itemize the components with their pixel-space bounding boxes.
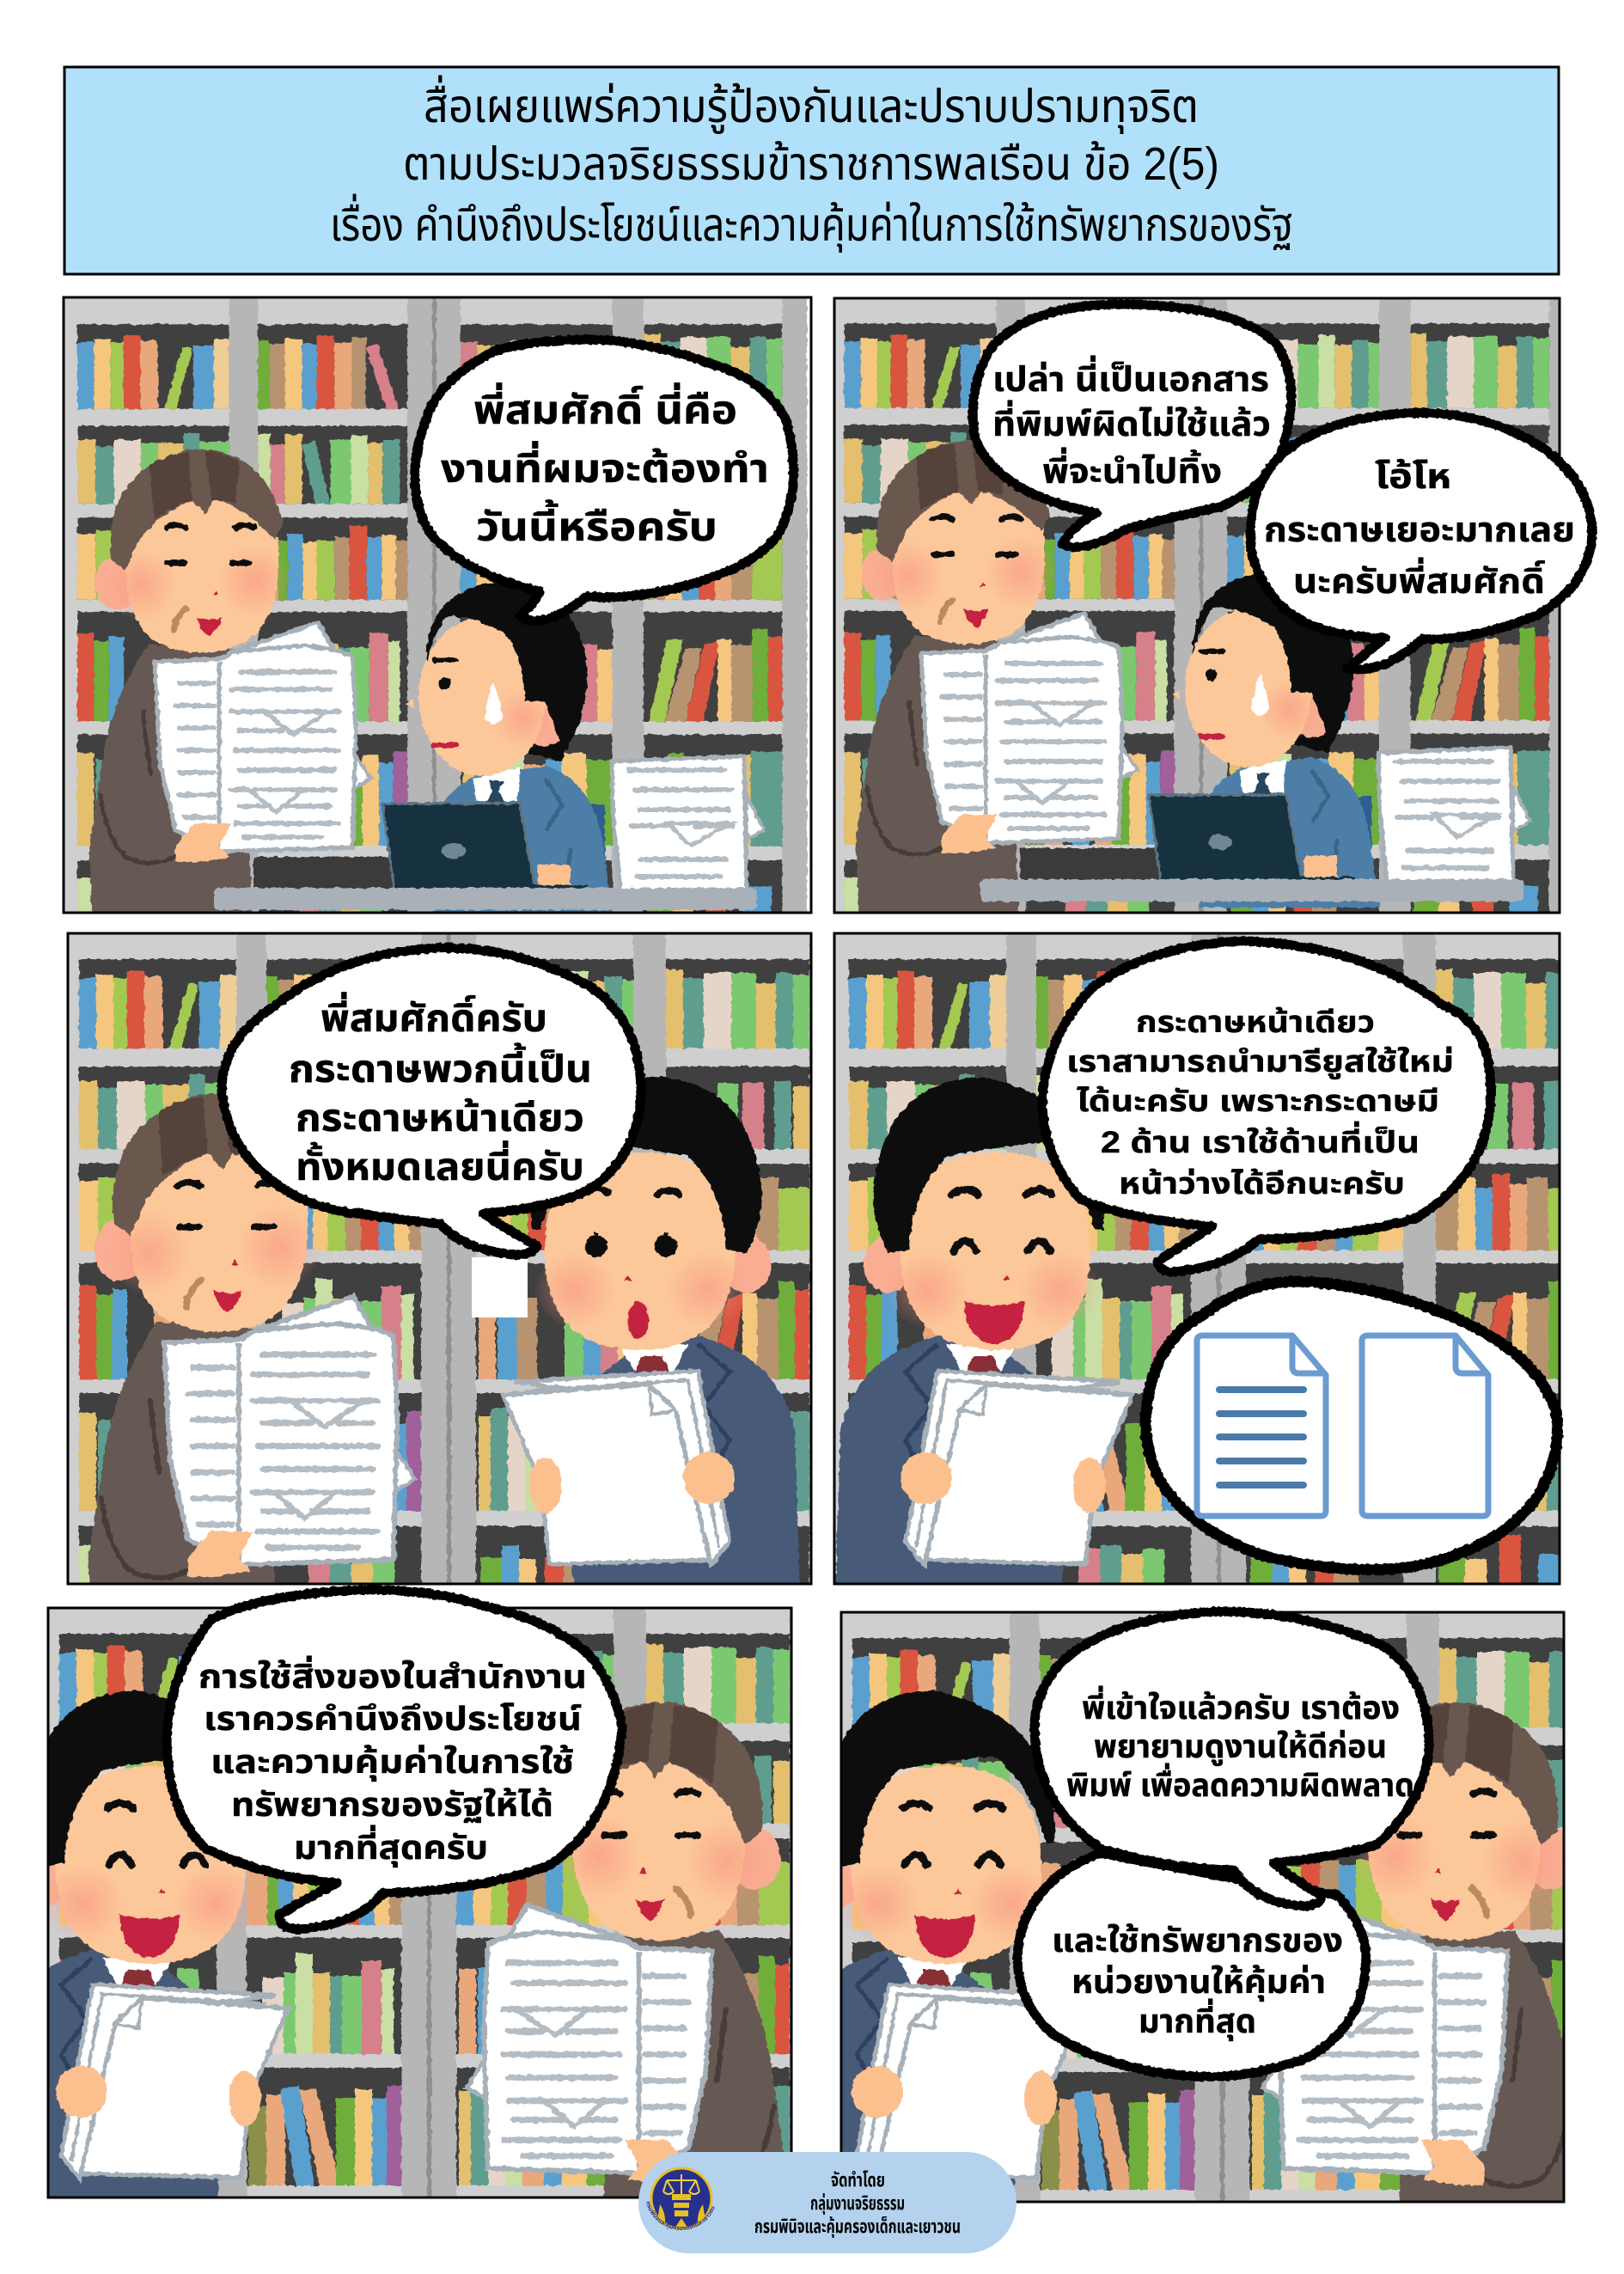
speech bubble panel 1: พี่สมศักดิ์ นี่คือ <box>473 382 737 432</box>
speech bubble panel 6 lower <box>1017 1853 1366 2077</box>
speech bubble panel 2 boss: ที่พิมพ์ผิดไม่ใช้แล้ว <box>992 400 1271 443</box>
icon: blank sheet <box>1362 1336 1488 1516</box>
speech bubble panel 5: เราควรคำนึงถึงประโยชน์ <box>204 1702 582 1738</box>
panel 1 scene <box>58 292 807 959</box>
speech bubble panel 6 upper: พี่เข้าใจแล้วครับ เราต้อง <box>1082 1685 1400 1726</box>
speech bubble panel 4 <box>1042 941 1491 1272</box>
title banner <box>64 67 1559 274</box>
speech bubble panel 5: การใช้สิ่งของในสำนักงาน <box>198 1655 587 1696</box>
title line 3: เรื่อง คำนึงถึงประโยชน์และความคุ้มค่าในการใช้ทรัพยากรของรัฐ <box>330 193 1293 253</box>
speech bubble panel 4: 2 ด้าน เราใช้ด้านที่เป็น <box>1101 1121 1419 1159</box>
speech bubble panel 1: วันนี้หรือครับ <box>476 499 717 549</box>
speech bubble panel 2 junior <box>1250 413 1592 669</box>
speech bubble panel 2 junior: นะครับพี่สมศักดิ์ <box>1293 557 1546 601</box>
speech bubble panel 4: ได้นะครับ เพราะกระดาษมี <box>1077 1085 1439 1118</box>
speech bubble panel 3 <box>222 948 641 1255</box>
title line 1: สื่อเผยแพร่ความรู้ป้องกันและปราบปรามทุจริต <box>424 75 1199 134</box>
icon: printed sheet <box>1197 1336 1326 1516</box>
panel 5 scene <box>50 1609 791 2197</box>
speech bubble panel 3: กระดาษหน้าเดียว <box>296 1097 584 1140</box>
speech bubble panel 6 lower: หน่วยงานให้คุ้มค่า <box>1071 1965 1326 2002</box>
speech bubble panel 3: ทั้งหมดเลยนี่ครับ <box>296 1140 584 1189</box>
title line 2: ตามประมวลจริยธรรมข้าราชการพลเรือน ข้อ 2(5) <box>403 138 1219 190</box>
speech bubble panel 2 boss: เปล่า นี่เป็นเอกสาร <box>992 355 1269 399</box>
panel 4 scene <box>835 935 1559 1583</box>
footer credit pill: จัดทำโดย <box>831 2169 885 2191</box>
panel 5: junior on resource value <box>46 1607 792 2198</box>
speech bubble panel 6 upper: พิมพ์ เพื่อลดความผิดพลาด <box>1066 1763 1414 1803</box>
speech bubble panel 6 lower: และใช้ทรัพยากรของ <box>1052 1923 1343 1959</box>
panel 2 scene <box>835 299 1559 911</box>
panel 6: boss understands <box>840 1611 1566 2204</box>
speech bubble panel 6 upper <box>1035 1611 1429 1906</box>
speech bubble panel 5: ทรัพยากรของรัฐให้ได้ <box>231 1788 553 1824</box>
speech bubble panel 4: เราสามารถนำมารียูสใช้ใหม่ <box>1066 1045 1454 1079</box>
speech bubble panel 5 <box>167 1590 622 1929</box>
picture bubble: printed and blank sheets <box>1145 1281 1557 1569</box>
speech bubble panel 6 upper: พยายามดูงานให้ดีก่อน <box>1094 1729 1387 1766</box>
speech bubble panel 5: มากที่สุดครับ <box>294 1825 488 1867</box>
footer credit pill: กลุ่มงานจริยธรรม <box>810 2192 905 2215</box>
white patch in panel 3 <box>472 1257 528 1317</box>
speech bubble panel 2 boss: พี่จะนำไปทิ้ง <box>1042 447 1222 491</box>
speech bubble panel 6 lower: มากที่สุด <box>1139 1998 1256 2041</box>
speech bubble panel 4: หน้าว่างได้อีกนะครับ <box>1119 1167 1405 1201</box>
speech bubble panel 4: กระดาษหน้าเดียว <box>1136 1006 1375 1039</box>
footer credit pill: กรมพินิจและคุ้มครองเด็กและเยาวชน <box>754 2216 961 2238</box>
speech bubble panel 5: และความคุ้มค่าในการใช้ <box>211 1745 574 1782</box>
icon: department seal <box>646 2167 715 2230</box>
speech bubble panel 1: งานที่ผมจะต้องทำ <box>441 441 769 491</box>
speech bubble panel 3: กระดาษพวกนี้เป็น <box>289 1042 592 1091</box>
speech bubble panel 2 junior: กระดาษเยอะมากเลย <box>1264 511 1575 549</box>
footer credit pill <box>638 2152 1017 2253</box>
panel 3 scene <box>69 935 809 1583</box>
icon: department seal: กรมพินิจและคุ้มครองเด็กและเยาวชน <box>646 2202 715 2230</box>
speech bubble panel 2 boss <box>973 304 1291 547</box>
panel 2: boss explains papers are waste <box>825 291 1574 951</box>
panel 6 scene <box>842 1614 1562 2200</box>
panel 1: boss carrying paper stack <box>58 292 811 959</box>
speech bubble panel 3: พี่สมศักดิ์ครับ <box>321 992 547 1040</box>
panel 3: junior notices single-sided paper <box>67 932 813 1585</box>
speech bubble panel 1 <box>415 339 794 620</box>
panel 4: junior explains reuse <box>833 932 1560 1585</box>
speech bubble panel 2 junior: โอ้โห <box>1375 457 1451 496</box>
